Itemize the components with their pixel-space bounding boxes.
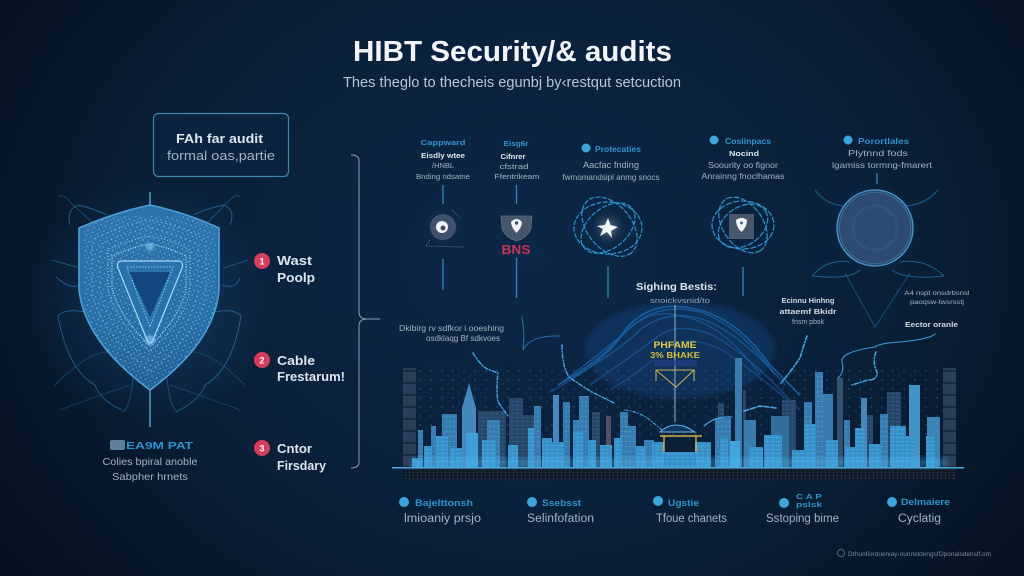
dome wave xyxy=(550,302,800,410)
label: BNS: BNS xyxy=(502,243,530,257)
icon: network orb xyxy=(709,188,777,262)
column 1 text: Eisdly wtee xyxy=(421,151,465,160)
legend item 2: Selinfofation xyxy=(527,513,594,525)
inner triangle xyxy=(118,261,182,343)
legend item 3: Ugstie xyxy=(668,498,699,508)
numbered item 2: Frestarum! xyxy=(277,370,345,384)
title: HIBT Security/& audits xyxy=(353,36,672,68)
label: tower: PHFAME xyxy=(654,340,696,351)
numbered item 1 xyxy=(254,253,315,285)
numbered item 3 xyxy=(254,440,326,473)
skyline base glow xyxy=(412,458,947,467)
legend item 4 xyxy=(766,494,839,525)
column 1 text xyxy=(416,138,470,181)
column 4 text: Cosiinpacs xyxy=(725,137,772,146)
column 3 text: Protecaties xyxy=(595,145,642,154)
column 1 text: Bnding ndsatne xyxy=(416,172,470,181)
column 3 text xyxy=(562,144,660,182)
ground line xyxy=(392,467,964,468)
column 2 text: cfstrad xyxy=(500,162,528,171)
skyline chart xyxy=(392,358,964,479)
column 2 text: Cifnrer xyxy=(500,152,526,161)
annotation: middle right: attaemf Bkidr xyxy=(780,307,837,316)
icon: eye orb xyxy=(424,208,464,247)
legend item 5: Cyclatig xyxy=(898,513,941,525)
dome base xyxy=(660,425,695,432)
shield caption: Sabpher hrnets xyxy=(112,471,188,483)
annotation: far right: paoqsw-twsrsstj xyxy=(910,299,964,306)
annotation: left xyxy=(399,324,504,343)
annotation: centre heading xyxy=(636,282,717,305)
central tower structure xyxy=(650,305,702,467)
lightning links xyxy=(473,317,935,430)
shield illustration xyxy=(50,192,248,427)
column 4 text: Nocind xyxy=(729,149,759,158)
column 2 text xyxy=(494,139,540,181)
shield dot field xyxy=(84,216,216,388)
annotation: far right xyxy=(904,290,970,329)
icon: caption glyph xyxy=(110,440,125,450)
legend item 5: Delmaiere xyxy=(901,497,950,507)
legend item 4: Sstoping bime xyxy=(766,513,839,525)
legend item 2 xyxy=(527,497,594,525)
column 4 text: Soourity oo fignor xyxy=(708,161,778,170)
legend item 4: pslsk xyxy=(796,502,822,509)
skyline middle layer xyxy=(418,358,940,467)
column 3 text: Aacfac fnding xyxy=(583,160,639,170)
callout box: formal audit: FAh far audit xyxy=(176,131,264,146)
column 5 text: Porortlales xyxy=(858,137,910,146)
callout box: formal audit xyxy=(154,114,288,176)
annotation: centre heading: Sighing Bestis: xyxy=(636,282,717,293)
skyline back layer xyxy=(403,368,956,467)
legend item 1 xyxy=(399,497,481,525)
legend item 2: Ssebsst xyxy=(542,498,581,508)
icon: large disc xyxy=(812,182,944,327)
column 3 text: fwmomandsipl anmg snocs xyxy=(562,172,660,182)
annotation: far right: A4 nspt onsdrbsnsl xyxy=(904,290,970,297)
ground strip xyxy=(403,469,956,479)
wire lines around shield xyxy=(52,196,248,412)
annotation: far right: Eector oranle xyxy=(905,320,958,329)
column 4 text xyxy=(702,136,784,181)
numbered item 3: Cntor xyxy=(277,442,312,456)
column 4 xyxy=(702,136,784,296)
legend item 5 xyxy=(887,497,950,525)
numbered item 1: Wast xyxy=(277,254,313,268)
footer note: Drhunfiordueniay-ounnstdengsfOponalsdenslf.om xyxy=(848,552,991,558)
shield caption: EA9M PAT xyxy=(126,440,194,452)
column 5 text: lgamiss tormng-fmarert xyxy=(832,160,933,170)
scattered data particles xyxy=(418,366,943,436)
numbered item 2 xyxy=(254,352,345,384)
central tower structure: 3% BHAKE xyxy=(650,351,701,360)
shield glow xyxy=(25,175,275,425)
column 5 xyxy=(812,136,944,327)
legend item 3: Tfoue chanets xyxy=(656,513,727,525)
bracket xyxy=(351,155,380,468)
numbered item 2: 2 xyxy=(259,356,265,366)
annotation: left: Dkibirg rv sdfkor i ooeshing xyxy=(399,324,504,333)
column 5 text: Plytnnd fods xyxy=(848,148,908,158)
numbered item 2: Cable xyxy=(277,354,315,368)
column 2 text: Ffentrikeam xyxy=(494,172,540,181)
annotation: middle right xyxy=(780,296,837,326)
column 3 xyxy=(562,144,660,298)
shield body xyxy=(79,205,219,390)
numbered item 3: Firsdary xyxy=(277,459,326,473)
column 2 xyxy=(494,139,540,298)
legend item 1: lmioaniy prsjo xyxy=(404,513,481,525)
numbered item 1: 1 xyxy=(259,256,265,266)
legend item 4: C A P xyxy=(796,494,822,501)
annotation: middle right: Ecinnu Hinhng xyxy=(782,296,835,305)
legend item 3 xyxy=(653,496,727,525)
annotation: left: osdklaqg Bf sdkvoes xyxy=(426,334,500,343)
annotation: centre heading: snoickvsnid/to xyxy=(650,298,710,305)
legend item 1: Bajelttonsh xyxy=(415,498,473,508)
shield caption xyxy=(102,440,198,483)
icon: star orb xyxy=(571,187,648,267)
shield caption: Colies bpiral anoble xyxy=(102,456,198,468)
skyline front layer xyxy=(412,424,934,467)
footer note xyxy=(838,550,991,558)
column 1 xyxy=(416,138,470,290)
column 4 text: Anrainng fnoclhamas xyxy=(702,172,784,181)
icon: small shield xyxy=(501,216,532,241)
column 5 text xyxy=(832,136,933,170)
subtitle: Thes theglo to thecheis egunbj by‹restqut setcuction xyxy=(343,75,681,91)
annotation: middle right: fnsm pbsk xyxy=(792,319,824,326)
callout box: formal audit: formal oas,partie xyxy=(167,149,275,163)
column 2 text: Eisg6r xyxy=(504,139,529,148)
numbered item 1: Poolp xyxy=(277,271,315,285)
column 1 text: Cappward xyxy=(420,138,466,147)
column 1 text: /HNBL xyxy=(432,161,454,170)
central axis xyxy=(149,192,151,427)
numbered item 3: 3 xyxy=(259,444,265,454)
